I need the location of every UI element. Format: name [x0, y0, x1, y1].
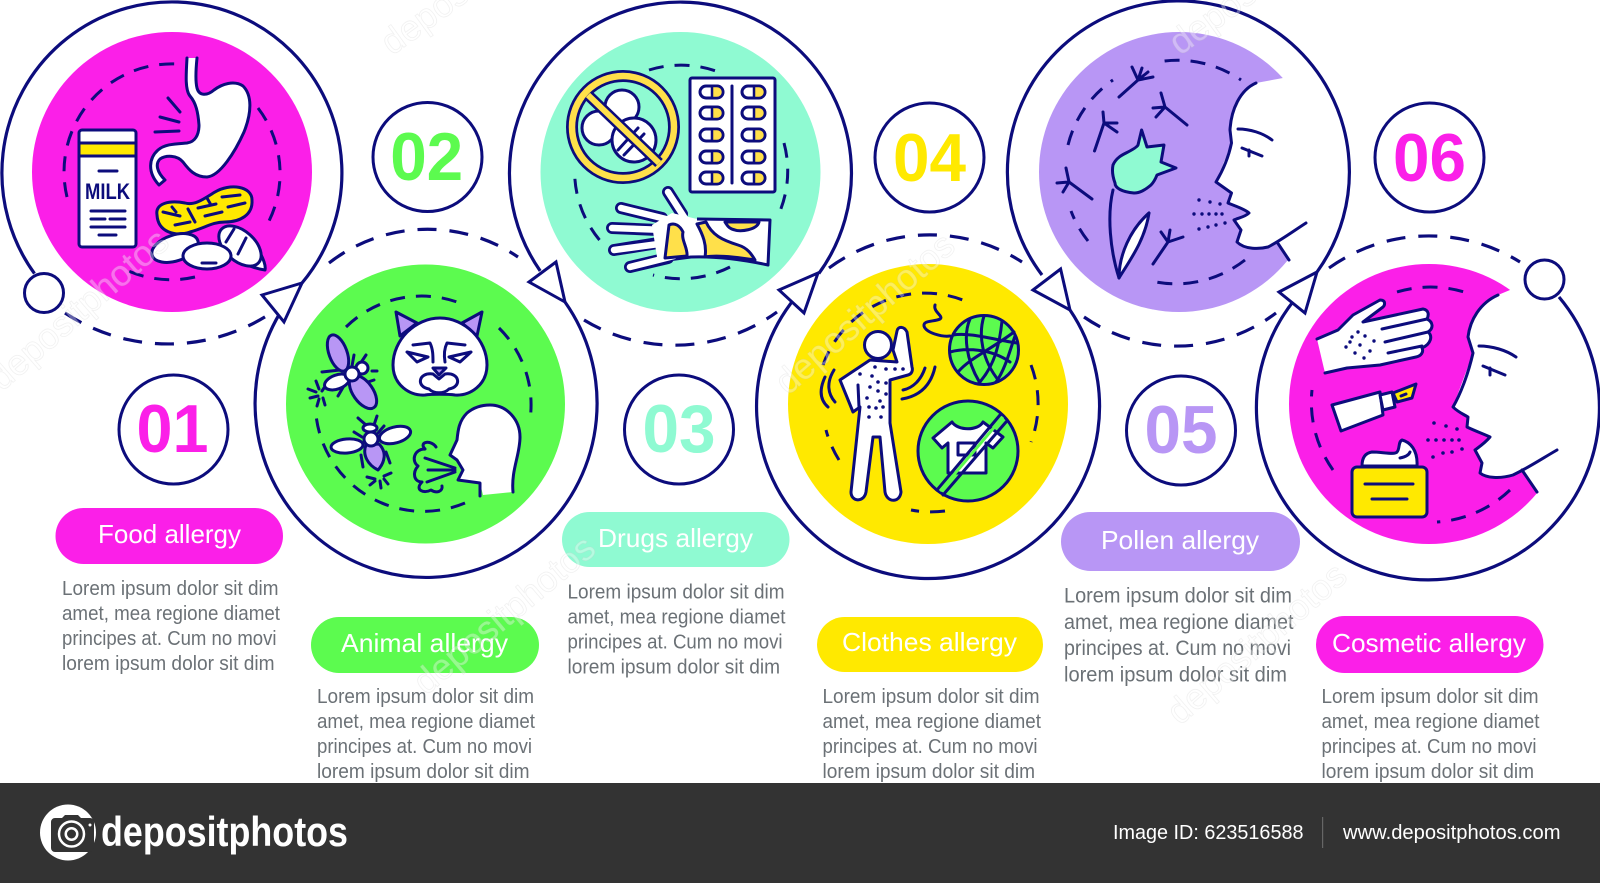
- text block: drugs allergy: Lorem ipsum dolor sit dim: [568, 580, 784, 604]
- text block: pollen allergy: Lorem ipsum dolor sit dim: [1064, 584, 1292, 608]
- text block: food allergy: Lorem ipsum dolor sit dim: [62, 577, 278, 600]
- label pill: pollen allergy: Pollen allergy: [1101, 525, 1259, 555]
- footer bar: [0, 783, 1600, 883]
- icon: face profile: [1426, 290, 1580, 495]
- number 03: [624, 375, 734, 484]
- text block: pollen allergy: lorem ipsum dolor sit dim: [1064, 662, 1287, 686]
- text block: animal allergy: Lorem ipsum dolor sit dim: [317, 685, 534, 708]
- panel: food allergy: [2, 2, 342, 675]
- icon: sneezing head: [414, 405, 520, 496]
- label pill: cosmetic allergy: [1316, 616, 1544, 673]
- arrow: pollen to cosmetic: [1279, 272, 1317, 313]
- label pill: cosmetic allergy: Cosmetic allergy: [1332, 628, 1526, 658]
- panel: clothes allergy: [757, 103, 1100, 783]
- label pill: clothes allergy: Clothes allergy: [842, 627, 1017, 657]
- watermark: depositphotos: [766, 224, 962, 402]
- clothes disc: [788, 264, 1068, 544]
- panel: pollen allergy: [1007, 1, 1349, 686]
- icon: dandelion seeds: [1057, 67, 1187, 264]
- text block: animal allergy: lorem ipsum dolor sit dim: [317, 760, 530, 783]
- food ring: [2, 2, 342, 344]
- drugs ring: [509, 2, 851, 345]
- icon: face profile: [1192, 78, 1330, 262]
- panel: cosmetic allergy: [1256, 103, 1599, 783]
- icon: peanut and beans: [148, 187, 269, 274]
- label pill: food allergy: [56, 508, 283, 564]
- text block: clothes allergy: [822, 685, 1041, 783]
- text block: food allergy: principes at. Cum no movi: [62, 627, 276, 650]
- arrow: animal to drugs: [529, 262, 565, 302]
- text block: cosmetic allergy: principes at. Cum no movi: [1322, 735, 1536, 758]
- text block: pollen allergy: principes at. Cum no movi: [1064, 636, 1291, 660]
- icon: no shirt sign: [918, 401, 1018, 501]
- text block: pollen allergy: amet, mea regione diamet: [1064, 610, 1294, 634]
- label pill: drugs allergy: Drugs allergy: [598, 523, 753, 553]
- cosmetic disc: [1289, 264, 1569, 544]
- number 04: 04: [893, 120, 966, 196]
- arrow: drugs to clothes: [779, 273, 818, 313]
- icon: wasp one: [308, 332, 382, 413]
- drugs disc: [540, 32, 820, 312]
- pollen disc: [1039, 32, 1319, 312]
- number 05: 05: [1144, 392, 1218, 468]
- watermark: depositphotos: [405, 527, 603, 702]
- icon: cream jar: [1352, 440, 1427, 517]
- label pill: drugs allergy: [562, 512, 790, 567]
- watermark: [0, 0, 1366, 732]
- cosmetic ring: [1256, 236, 1599, 580]
- label pill: food allergy: Food allergy: [98, 519, 241, 549]
- text block: cosmetic allergy: Lorem ipsum dolor sit dim: [1322, 685, 1538, 708]
- icon: stomach: [151, 58, 250, 185]
- number 04: [875, 103, 984, 212]
- icon: cat: [393, 312, 487, 395]
- label pill: animal allergy: [311, 617, 539, 673]
- number 06: 06: [1393, 120, 1466, 196]
- number 02: 02: [390, 119, 463, 195]
- icon: milk carton: [79, 130, 136, 247]
- text block: drugs allergy: principes at. Cum no movi: [568, 630, 782, 654]
- text block: cosmetic allergy: amet, mea regione diamet: [1322, 710, 1540, 733]
- text block: clothes allergy: Lorem ipsum dolor sit dim: [822, 685, 1040, 708]
- panel: animal allergy: [255, 102, 597, 783]
- animal ring: [255, 229, 597, 577]
- text block: food allergy: lorem ipsum dolor sit dim: [62, 652, 274, 675]
- logo mark: [40, 804, 96, 860]
- arrow: clothes to pollen: [1033, 269, 1070, 310]
- text block: cosmetic allergy: [1322, 685, 1540, 783]
- food disc: [32, 32, 312, 312]
- text block: drugs allergy: [568, 580, 786, 678]
- number 02: [373, 102, 482, 212]
- image id: Image ID: 623516588: [1113, 822, 1304, 844]
- icon: hand with spots: [1317, 300, 1432, 373]
- text block: cosmetic allergy: lorem ipsum dolor sit dim: [1322, 760, 1534, 783]
- clothes ring: [757, 235, 1100, 579]
- icon: milk carton: MILK: [85, 179, 130, 204]
- pollen ring: [1007, 1, 1349, 346]
- panel: drugs allergy: [509, 2, 851, 679]
- start node: [24, 274, 64, 312]
- text block: clothes allergy: lorem ipsum dolor sit dim: [822, 760, 1035, 783]
- icon: no pills sign: [572, 76, 674, 178]
- website url: www.depositphotos.com: [1342, 822, 1560, 844]
- icon: hand with rash: [612, 192, 770, 267]
- text block: animal allergy: amet, mea regione diamet: [317, 710, 535, 733]
- text block: animal allergy: [317, 685, 535, 783]
- icon: blister pack: [690, 78, 775, 192]
- text block: drugs allergy: amet, mea regione diamet: [568, 606, 786, 628]
- text block: food allergy: amet, mea regione diamet: [62, 602, 280, 625]
- icon: person with rash: [821, 327, 935, 500]
- text block: food allergy: [62, 577, 280, 675]
- logo wordmark: depositphotos: [101, 808, 348, 855]
- number 01: [119, 375, 228, 484]
- watermark: depositphotos: [1158, 554, 1354, 732]
- icon: lipstick: [1332, 384, 1416, 431]
- text block: pollen allergy: [1064, 584, 1294, 686]
- text block: animal allergy: principes at. Cum no movi: [317, 735, 532, 758]
- icon: yarn ball: [924, 305, 1018, 384]
- number 05: [1126, 376, 1236, 485]
- label pill: pollen allergy: [1061, 512, 1300, 571]
- text block: clothes allergy: principes at. Cum no movi: [822, 735, 1038, 758]
- number 03: 03: [642, 391, 716, 467]
- icon: tulip: [1110, 130, 1176, 278]
- text block: clothes allergy: amet, mea regione diamet: [822, 710, 1041, 733]
- arrow: food to animal: [262, 283, 302, 322]
- label pill: animal allergy: Animal allergy: [341, 628, 508, 658]
- icon: wasp two: [330, 416, 413, 488]
- number 06: [1375, 103, 1484, 212]
- text block: drugs allergy: lorem ipsum dolor sit dim: [568, 656, 780, 678]
- number 01: 01: [136, 391, 208, 467]
- animal disc: [286, 264, 565, 544]
- end node: [1525, 260, 1564, 299]
- label pill: clothes allergy: [817, 617, 1043, 672]
